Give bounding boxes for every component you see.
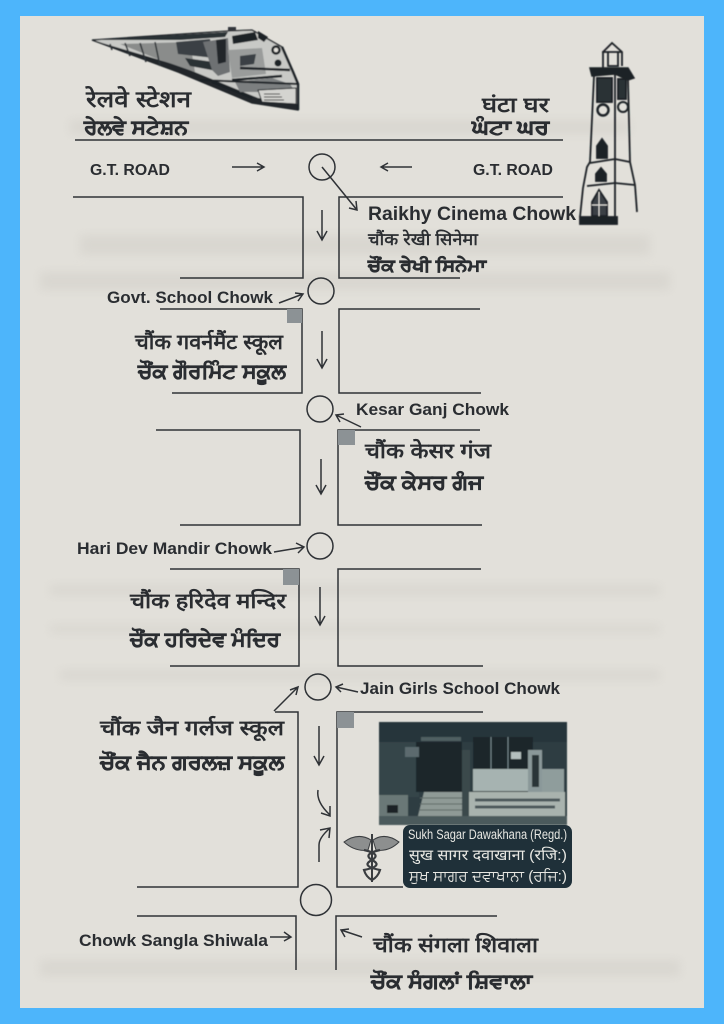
- text: Raikhy Punjabi: ਚੌਂਕ ਰੇਖੀ ਸਿਨੇਮਾ: [367, 255, 487, 275]
- text: railway station: [83, 86, 192, 139]
- roundabout: Kesar Ganj: [307, 396, 333, 422]
- arrow: left road: [381, 163, 412, 171]
- text: G.T. Road left: G.T. ROAD: [90, 162, 170, 179]
- arrow: G.T. Road left: [232, 163, 264, 171]
- road block: sixth: [137, 916, 497, 970]
- roundabout: Raikhy Cinema Chowk: [309, 154, 335, 180]
- text: clock tower: [471, 94, 551, 139]
- arrow: Jain Girls right: [336, 684, 358, 692]
- text: Jain Punjabi: ਚੌਂਕ ਜੈਨ ਗਰਲਜ਼ ਸਕੂਲ: [99, 749, 286, 777]
- arrow: curved turn up: [319, 828, 330, 862]
- roundabout: Jain Girls: [305, 674, 331, 700]
- arrow: Hari Dev: [274, 543, 304, 553]
- text: Jain Girls School Chowk: Jain Girls School Chowk: [360, 679, 561, 698]
- arrow: Sangla left: [270, 932, 291, 941]
- arrow: to Raikhy Cinema: [322, 167, 357, 210]
- photo: Sukh Sagar shopfront: [379, 722, 567, 825]
- road block: fourth: [170, 569, 483, 666]
- marker: grey square: [337, 712, 354, 728]
- text: clock tower: घंटा घर: [482, 94, 549, 117]
- text: Kesar Punjabi: ਚੌਂਕ ਕੇਸਰ ਗੰਜ: [364, 470, 484, 494]
- text: Govt Punjabi: ਚੌਂਕ ਗੌਰਮਿੰਟ ਸਕੂਲ: [137, 359, 288, 386]
- marker: grey square: [287, 309, 302, 323]
- icon: caduceus: [344, 834, 399, 882]
- arrow: curved turn down: [318, 790, 330, 816]
- arrow: Sangla right: [341, 929, 362, 937]
- text: Govt Hindi: चौंक गवर्नमैंट स्कूल: [135, 330, 284, 355]
- road block: third: [156, 430, 482, 525]
- label panel: Sukh Sagar Dawakhana: सुख सागर दवाखाना (रजि:): [409, 846, 567, 865]
- arrow: Jain Girls left: [274, 687, 298, 711]
- text: Raikhy Hindi: चौंक रेखी सिनेमा: [368, 229, 479, 249]
- marker: grey square: [283, 569, 299, 585]
- roundabout: Hari Dev: [307, 533, 333, 559]
- text: railway station: ਰੇਲਵੇ ਸਟੇਸ਼ਨ: [83, 115, 190, 139]
- arrow: Govt School: [279, 293, 303, 303]
- text: Govt School Chowk: Govt. School Chowk: [107, 288, 274, 307]
- text: Jain Hindi: चौंक जैन गर्लज स्कूल: [100, 716, 285, 741]
- label panel: Sukh Sagar Dawakhana: [403, 825, 572, 888]
- text: railway station: रेलवे स्टेशन: [85, 86, 192, 112]
- icon: clock tower: [580, 43, 637, 224]
- text: Hari Dev Hindi: चौंक हरिदेव मन्दिर: [130, 589, 286, 613]
- text: Chowk Sangla Shiwala: Chowk Sangla Shiwala: [79, 931, 269, 950]
- arrow: Kesar Ganj: [336, 414, 361, 427]
- text: Sangla Punjabi: ਚੌਂਕ ਸੰਗਲਾਂ ਸ਼ਿਵਾਲਾ: [370, 969, 533, 993]
- text: G.T. Road right: G.T. ROAD: [473, 162, 553, 179]
- arrow: down 1: [317, 210, 327, 240]
- arrow: down 3: [316, 459, 326, 494]
- text: clock tower: ਘੰਟਾ ਘਰ: [471, 115, 551, 139]
- roundabout: Sangla Shiwala: [300, 884, 332, 916]
- text: Kesar Hindi: चौंक केसर गंज: [365, 439, 491, 463]
- road block: fifth: [137, 712, 483, 887]
- label panel: Sukh Sagar Dawakhana: ਸੁਖ ਸਾਗਰ ਦਵਾਖਾਨਾ (ਰਜਿ:): [408, 868, 567, 885]
- road block: second: [160, 309, 481, 393]
- arrow: down 5: [314, 726, 324, 765]
- label panel: Sukh Sagar Dawakhana: Sukh Sagar Dawakhana (Regd.): [408, 827, 567, 842]
- text: Hari Dev Punjabi: ਚੌਂਕ ਹਰਿਦੇਵ ਮੰਦਿਰ: [129, 627, 282, 651]
- marker: grey square: [338, 430, 355, 445]
- icon: train: [92, 27, 298, 110]
- arrow: down 4: [315, 587, 325, 625]
- divider lines: [75, 139, 563, 141]
- text: Hari Dev Mandir Chowk: Hari Dev Mandir Chowk: [77, 539, 273, 558]
- arrow: down 2: [317, 331, 327, 368]
- text: Raikhy Cinema Chowk: Raikhy Cinema Chowk: [368, 203, 576, 225]
- text: Sangla Hindi: चौंक संगला शिवाला: [373, 933, 539, 957]
- text: Kesar Ganj Chowk: Kesar Ganj Chowk: [356, 400, 510, 419]
- roundabout: Govt School: [308, 278, 334, 304]
- road block: first: [73, 197, 563, 278]
